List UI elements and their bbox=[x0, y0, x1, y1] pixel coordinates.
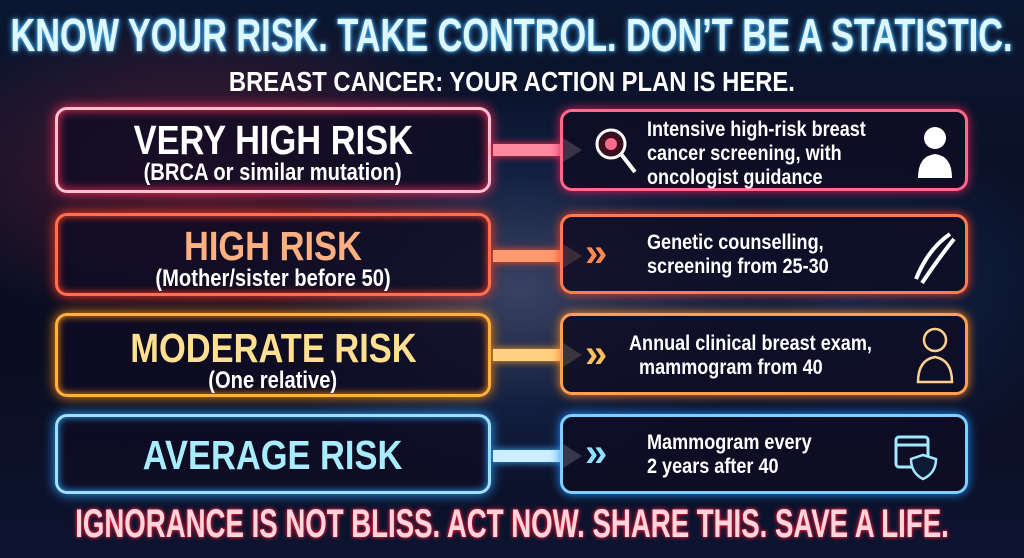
panel: mammogram every 2 years: » bbox=[585, 431, 607, 475]
arrow 4 bbox=[488, 444, 582, 468]
panel: intensive screening: Intensive high-risk breast bbox=[647, 118, 866, 141]
panel: annual exam: » bbox=[585, 332, 607, 376]
panel: intensive screening: cancer screening, with bbox=[647, 142, 842, 165]
panel: moderate risk: (One relative) bbox=[209, 367, 337, 394]
panel: high risk: HIGH RISK bbox=[184, 223, 362, 269]
panel: annual exam: Annual clinical breast exam, bbox=[629, 332, 872, 355]
panel: high risk bbox=[55, 213, 491, 296]
panel: annual exam bbox=[560, 313, 968, 395]
panel: very high risk bbox=[55, 107, 491, 193]
panel: genetic counselling: » bbox=[585, 231, 607, 275]
arrow 3 bbox=[488, 342, 582, 368]
panel: very high risk: (BRCA or similar mutation) bbox=[144, 159, 402, 186]
icon: male doctor bbox=[916, 328, 954, 384]
panel: moderate risk: MODERATE RISK bbox=[130, 325, 416, 371]
footer tagline: IGNORANCE IS NOT BLISS. ACT NOW. SHARE THIS. SAVE A LIFE. bbox=[75, 502, 949, 546]
arrow 1 bbox=[488, 138, 582, 162]
panel: intensive screening bbox=[560, 109, 968, 191]
panel: very high risk: VERY HIGH RISK bbox=[133, 117, 413, 163]
icon: female doctor bbox=[918, 127, 952, 178]
icon: DNA bbox=[914, 232, 956, 284]
panel: mammogram every 2 years: Mammogram every bbox=[647, 431, 812, 454]
panel: average risk: AVERAGE RISK bbox=[143, 432, 403, 478]
panel: intensive screening: oncologist guidance bbox=[647, 166, 823, 189]
panel: moderate risk bbox=[55, 313, 491, 397]
panel: genetic counselling: Genetic counselling, bbox=[647, 231, 824, 254]
title: KNOW YOUR RISK. TAKE CONTROL. DON’T BE A STATISTIC. bbox=[11, 9, 1013, 61]
subtitle: BREAST CANCER: YOUR ACTION PLAN IS HERE. bbox=[229, 66, 795, 97]
arrow 2 bbox=[488, 244, 582, 268]
panel: average risk bbox=[55, 414, 491, 494]
panel: high risk: (Mother/sister before 50) bbox=[155, 265, 391, 292]
panel: genetic counselling: screening from 25-30 bbox=[647, 255, 829, 278]
panel: genetic counselling bbox=[560, 214, 968, 294]
panel: annual exam: mammogram from 40 bbox=[639, 356, 823, 379]
panel: mammogram every 2 years bbox=[560, 414, 968, 494]
icon: calendar shield bbox=[894, 436, 938, 480]
panel: mammogram every 2 years: 2 years after 40 bbox=[647, 455, 779, 478]
icon: magnifier bbox=[596, 128, 636, 174]
